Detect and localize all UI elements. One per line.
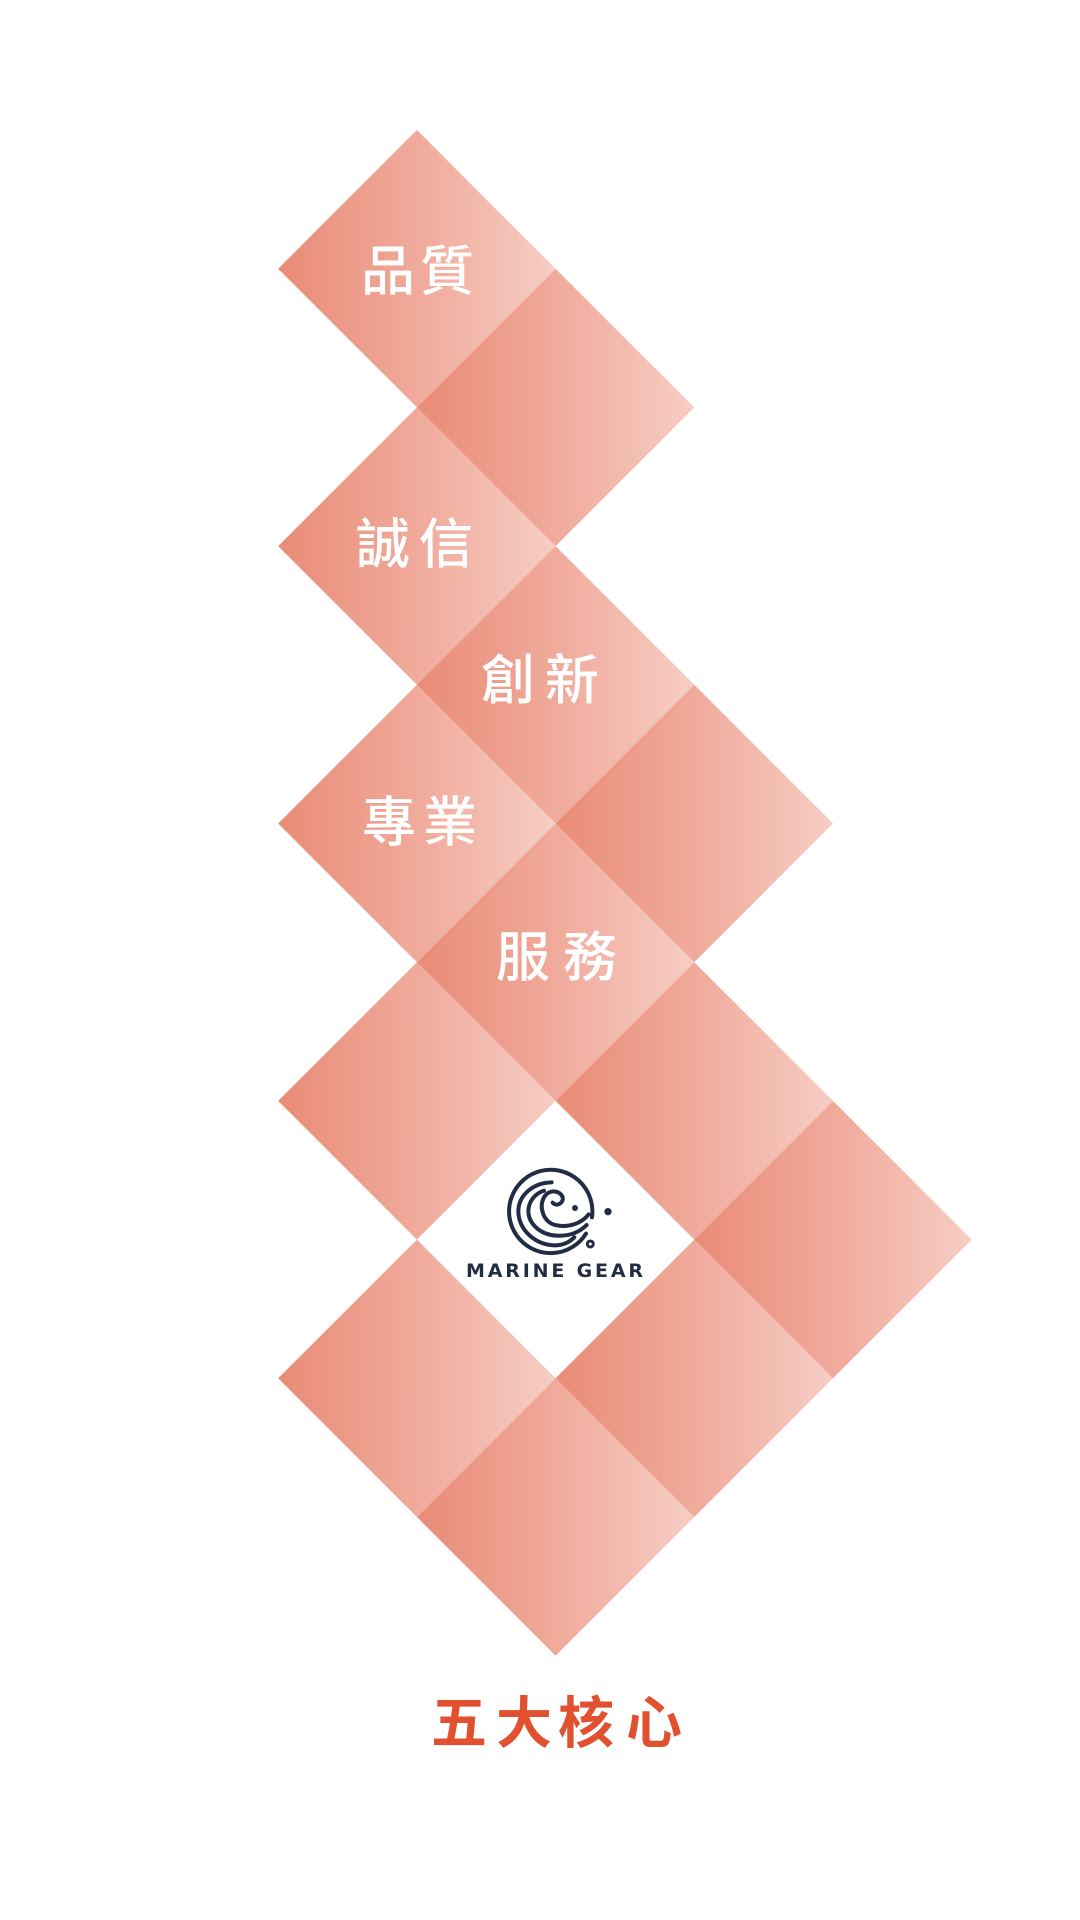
diamond: row 2 xyxy=(417,269,694,546)
diamond grid xyxy=(278,130,972,1656)
label: professionalism: 專業 xyxy=(362,793,477,853)
diamond: service xyxy=(417,824,694,1101)
diamond: professionalism xyxy=(278,685,556,962)
logo: Marine Gear xyxy=(466,1170,643,1282)
label: integrity: 誠信 xyxy=(356,515,473,575)
wordmark: MARINE GEAR xyxy=(466,1260,643,1282)
diamond: innovation xyxy=(417,546,694,824)
diamond: right tip xyxy=(694,1101,972,1378)
label: quality: 品質 xyxy=(361,242,474,302)
diamond: quality xyxy=(278,130,556,407)
icon: wave circle xyxy=(509,1170,612,1253)
label: innovation: 創新 xyxy=(481,651,599,711)
diamond: row 5 right xyxy=(556,685,833,962)
diamond: row 9 right xyxy=(556,1240,833,1517)
diamond: bottom xyxy=(417,1378,694,1656)
diamond: row 7 right xyxy=(556,962,833,1240)
title: 五大核心 xyxy=(431,1692,682,1755)
label: service: 服務 xyxy=(496,928,617,988)
diamond: row 9 left xyxy=(278,1240,556,1517)
diamond: row 7 left xyxy=(278,962,556,1240)
diamond: integrity xyxy=(278,407,556,685)
